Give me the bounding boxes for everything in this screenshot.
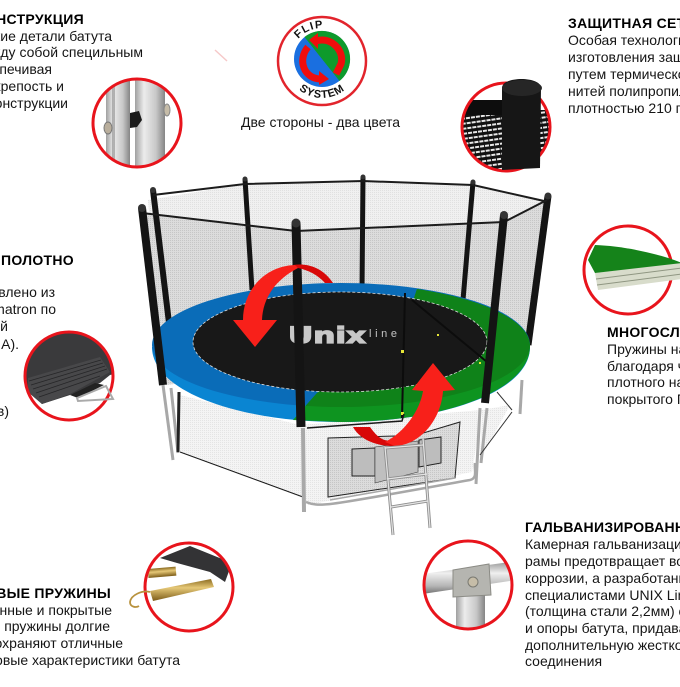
logo on mat: Unix (288, 324, 366, 349)
logo disc: green half (304, 31, 350, 81)
logo disc: blue half (294, 31, 350, 87)
top ropes (142, 181, 547, 231)
door panel (328, 422, 460, 497)
net pole (502, 79, 541, 170)
text: й (0, 318, 8, 334)
logo label: flip: FLIP (294, 20, 322, 38)
logo ring (278, 17, 366, 105)
icon ring: safety net (462, 83, 550, 171)
rim top green (306, 289, 530, 407)
icon: spring detail (130, 543, 233, 631)
back black leg (178, 392, 179, 452)
icon ring: pipe lock (93, 79, 181, 167)
flip arrow: back section (293, 264, 333, 283)
logo arrow: lower red (303, 47, 329, 85)
icon: safety net detail (462, 79, 550, 171)
back poles (153, 177, 548, 345)
skirt lower edge (180, 452, 303, 497)
text: плотностью 210 г (568, 100, 680, 116)
flip arrow: lower back section (353, 427, 397, 446)
icon: frame joint detail (422, 541, 512, 635)
jumping mat (193, 292, 487, 392)
trampoline illustration (138, 174, 552, 535)
lower skirt net (180, 395, 482, 505)
guy wire (480, 392, 512, 455)
inner zip lines (402, 293, 487, 418)
rim top blue (152, 283, 530, 407)
icon ring: frame joint (424, 541, 512, 629)
logo label: system: SYSTEM (300, 84, 344, 98)
icon ring: mat (25, 332, 113, 420)
lower net opening frame (307, 414, 404, 428)
icon: mat detail (20, 331, 118, 421)
door windows (352, 448, 375, 476)
ladder (385, 438, 430, 535)
rim side blue (152, 347, 530, 422)
flip system logo (276, 16, 368, 106)
spring body (150, 579, 214, 601)
text block: construction (0, 11, 112, 44)
icon ring: spring (145, 543, 233, 631)
flip arrow: downward red (233, 265, 298, 347)
icon: pipe lock detail (104, 78, 170, 170)
upper net front darker (146, 200, 546, 385)
spring hook (130, 592, 150, 607)
steel ring (77, 386, 113, 401)
logo suffix on mat: line (369, 328, 397, 340)
upper net back (148, 181, 546, 385)
decorative red mark (215, 50, 227, 61)
legs (163, 380, 522, 512)
front poles (142, 208, 504, 427)
text block: mat: ПОЛОТНО (1, 252, 74, 268)
flip arrow: upward red (385, 363, 455, 446)
pole caps (138, 174, 552, 228)
rim green side (293, 289, 530, 422)
logo arrow: upper red (309, 33, 342, 74)
right side guy net (480, 405, 510, 460)
text: соединения (525, 653, 602, 669)
caption: two sides two colors: Две стороны - два цвета (241, 114, 400, 130)
foam layers (595, 262, 680, 290)
icon: multilayer mat edge (584, 226, 680, 314)
green cover (588, 245, 680, 273)
